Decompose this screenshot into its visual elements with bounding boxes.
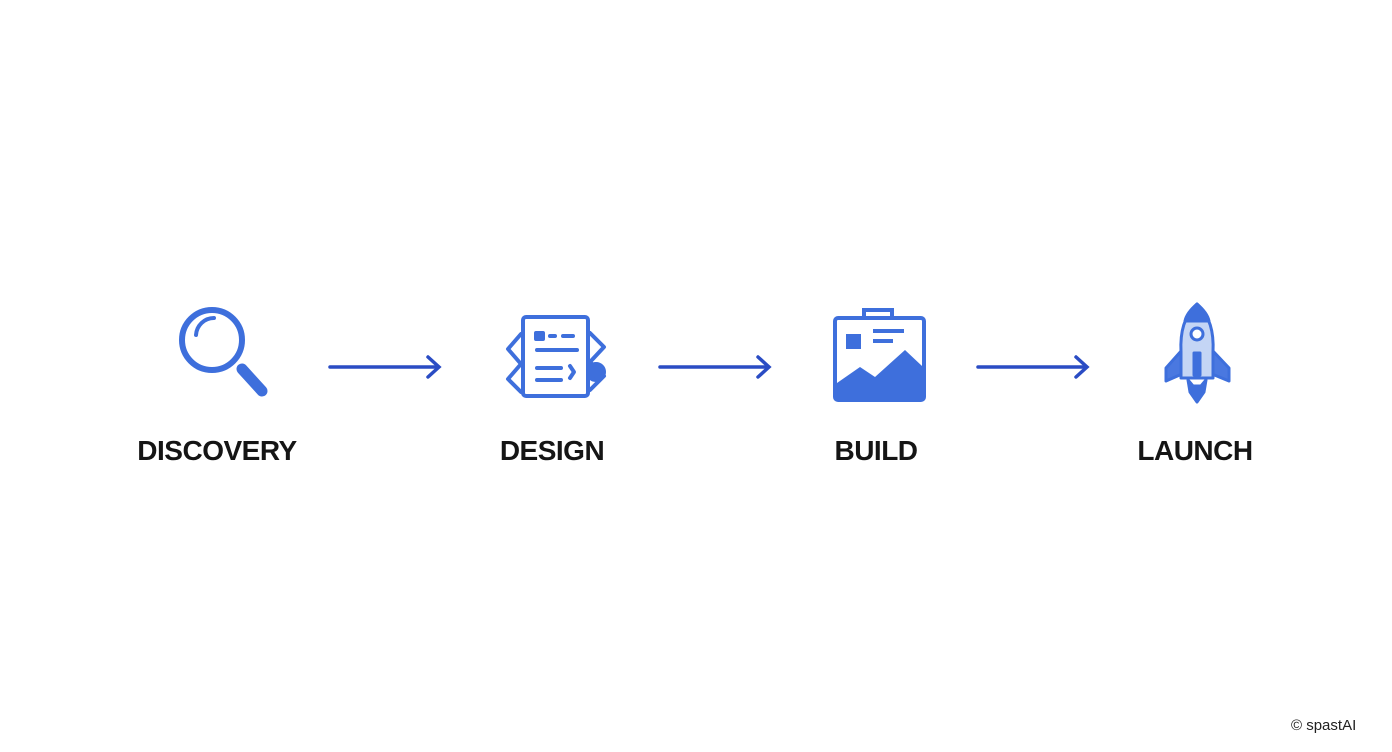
arrow 2 (660, 357, 769, 377)
icon: magnifying glass (182, 310, 262, 391)
icon: rocket (1166, 304, 1229, 402)
icon: design document (508, 317, 604, 396)
icon: build image card (835, 310, 924, 400)
label: build: BUILD (834, 435, 918, 466)
watermark: © spastAI (1291, 717, 1356, 734)
label: design: DESIGN (500, 435, 604, 466)
arrow 3 (978, 357, 1087, 377)
arrow 1 (330, 357, 439, 377)
label: discovery: DISCOVERY (137, 435, 297, 466)
label: launch: LAUNCH (1137, 435, 1253, 466)
